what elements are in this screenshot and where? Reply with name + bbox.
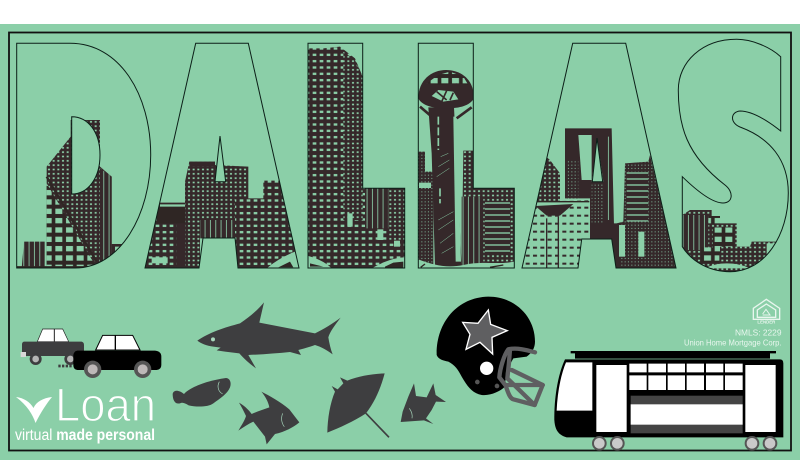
icon: shark xyxy=(197,302,341,368)
wordmark Loan: Loan xyxy=(55,378,156,431)
icon: equal housing lender xyxy=(753,299,780,324)
roof xyxy=(571,351,776,359)
icon: v leaf mark xyxy=(16,397,52,423)
side panel xyxy=(631,396,743,433)
window rows xyxy=(629,364,743,390)
letter A with skyline xyxy=(522,43,677,268)
icon: stingray xyxy=(327,373,389,437)
tagline: virtual made personal xyxy=(15,427,155,444)
letter A with skyline xyxy=(145,43,300,268)
icon: grey car xyxy=(21,329,84,366)
vLoan logo xyxy=(15,378,156,444)
company name: Union Home Mortgage Corp. xyxy=(684,338,782,348)
NMLS text xyxy=(684,328,782,348)
letter L with skyline xyxy=(308,43,405,268)
body xyxy=(554,359,783,437)
icon: fish one xyxy=(173,378,231,407)
wheels xyxy=(593,437,776,450)
facemask xyxy=(499,349,543,405)
icon: equal housing lender: LENDER xyxy=(757,319,776,324)
icon: trolley xyxy=(554,351,783,450)
letter S with skyline xyxy=(678,39,788,273)
letter D with skyline xyxy=(17,43,151,268)
star xyxy=(463,310,507,354)
icon: fish two xyxy=(238,392,299,444)
letter L with Reunion Tower xyxy=(418,43,514,268)
icon: black car xyxy=(73,335,161,378)
doors xyxy=(596,365,627,432)
icon: fish three xyxy=(401,383,446,424)
icon: football helmet xyxy=(437,297,543,405)
NMLS number: NMLS: 2229 xyxy=(735,328,782,338)
front window xyxy=(557,362,592,411)
